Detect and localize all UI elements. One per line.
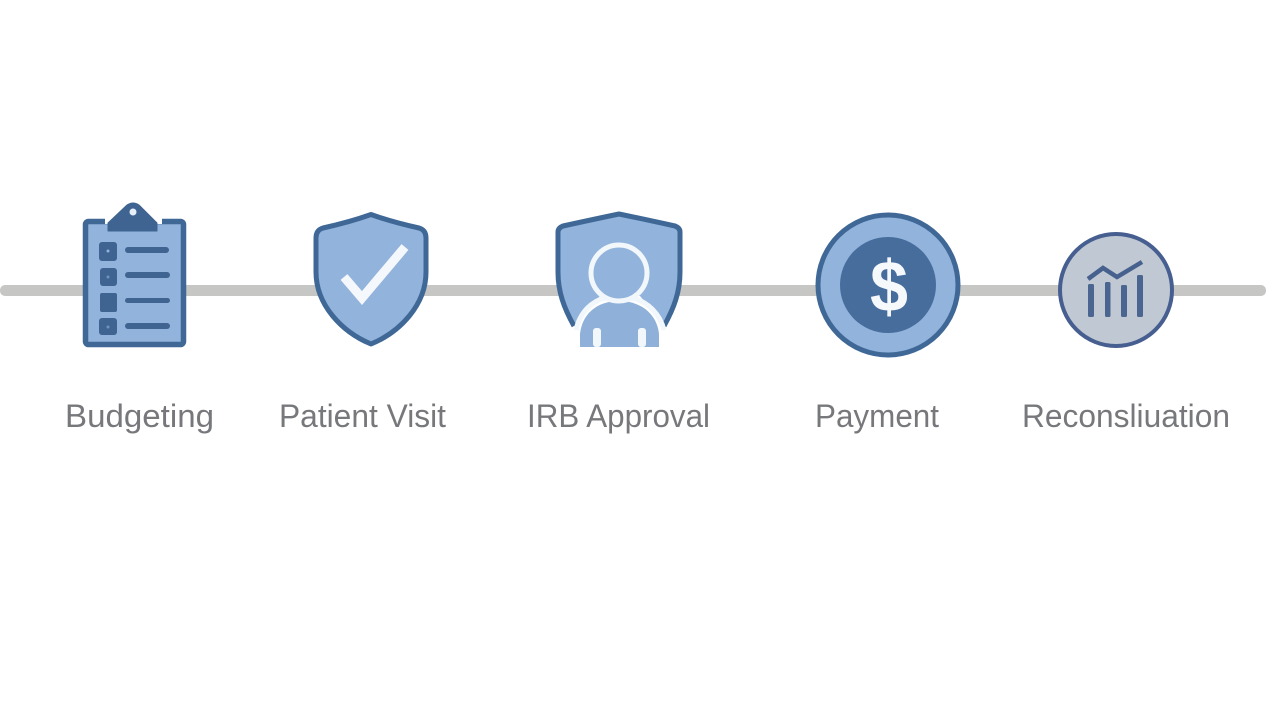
- label: Reconsliuation: Reconsliuation: [1022, 398, 1230, 434]
- icon: dollar coin: $: [870, 247, 908, 327]
- icon: shield with person: [558, 214, 680, 350]
- icon: shield with check mark: [316, 214, 426, 344]
- icon: clipboard checklist: [86, 203, 184, 344]
- timeline connector line: [0, 285, 1266, 296]
- label: Budgeting: Budgeting: [65, 398, 214, 434]
- label: IRB Approval: IRB Approval: [527, 398, 710, 434]
- icon: reconciliation chart: [1060, 234, 1172, 346]
- label: Patient Visit: Patient Visit: [279, 398, 446, 434]
- label: Payment: Payment: [815, 398, 939, 434]
- icon: dollar coin: [818, 215, 958, 355]
